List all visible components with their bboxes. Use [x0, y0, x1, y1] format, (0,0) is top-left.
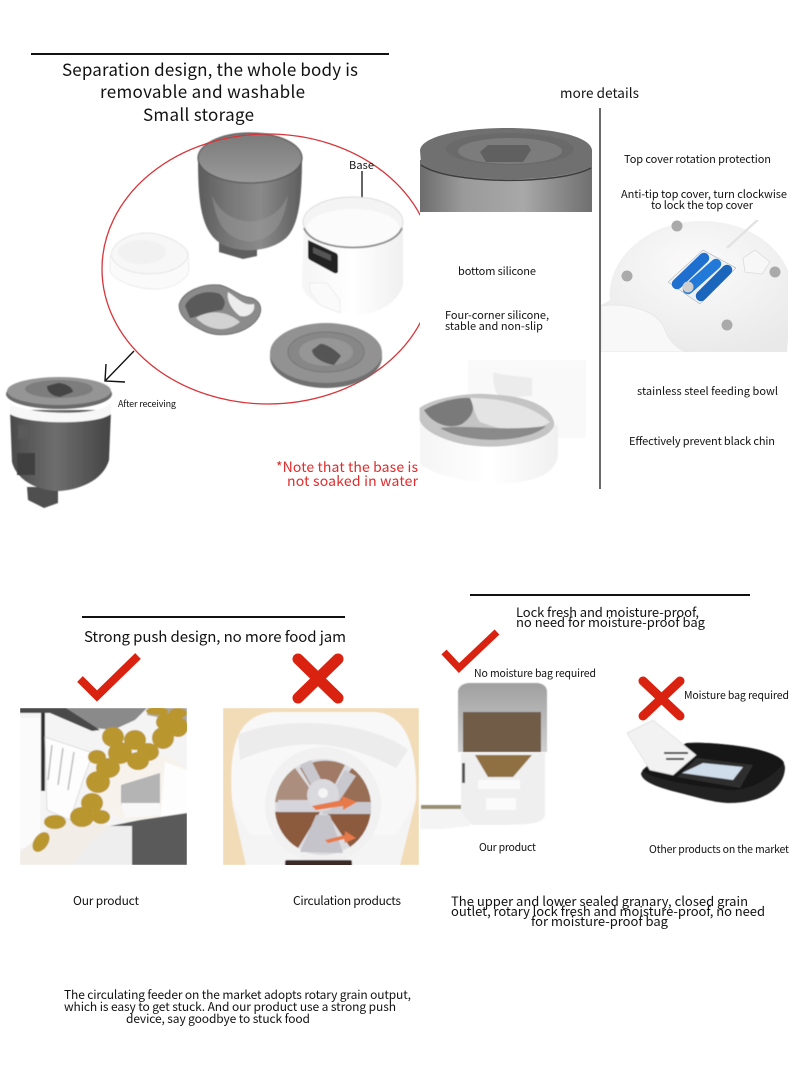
- text: sealed granary explanation: for moisture-proof bag: [531, 911, 669, 930]
- caption: four-corner silicone: stable and non-slip: [445, 318, 543, 334]
- panel: separation design heading: [31, 54, 389, 126]
- caption: anti-tip top cover: to lock the top cover: [651, 197, 754, 213]
- text: sealed granary explanation: The upper and lower sealed granary, closed grain: [451, 891, 748, 910]
- icon: red check small: [444, 632, 497, 668]
- product: assembled feeder: [6, 377, 112, 508]
- panel: separation design heading: Separation design, the whole body is: [62, 56, 358, 81]
- caption: four-corner silicone: Four-corner silicone,: [445, 307, 549, 323]
- caption: four-corner silicone: [445, 307, 549, 334]
- product: stainless steel bowl: [179, 285, 261, 335]
- caption: circulation products: Circulation products: [293, 892, 401, 909]
- text: sealed granary explanation: [451, 891, 765, 930]
- label: base: Base: [349, 157, 374, 173]
- divider: [599, 108, 601, 489]
- text: circulating feeder explanation: device, say goodbye to stuck food: [126, 1010, 310, 1027]
- caption: top cover rotation protection: Top cover rotation protection: [624, 151, 771, 167]
- red note: [276, 457, 419, 491]
- product: other tray with moisture bag: [627, 720, 785, 803]
- image: feeding bowl: [420, 360, 586, 483]
- caption: after receiving: After receiving: [118, 397, 176, 410]
- heading: lock fresh: no need for moisture-proof bag: [516, 612, 706, 631]
- label: base: [349, 157, 374, 200]
- caption: anti-tip top cover: [621, 186, 787, 213]
- caption: other products on the market: Other products on the market: [649, 842, 789, 857]
- red note: *Note that the base is: [276, 457, 418, 477]
- red note: not soaked in water: [287, 471, 419, 491]
- panel: separation design heading: removable and washable: [100, 78, 305, 103]
- product: white base unit: [302, 197, 403, 315]
- text: circulating feeder explanation: The circulating feeder on the market adopts rotary grain output,: [64, 986, 411, 1003]
- heading: more details: more details: [560, 82, 639, 102]
- product: white bowl: [110, 233, 189, 289]
- image: our product push mechanism: [20, 707, 188, 865]
- image: circulation product: [223, 708, 419, 868]
- caption: our product feeder: Our product: [479, 840, 536, 855]
- heading: strong push design: Strong push design, no more food jam: [84, 626, 346, 647]
- red ellipse outline: [102, 134, 434, 404]
- text: sealed granary explanation: outlet, rotary lock fresh and moisture-proof, no need: [451, 901, 765, 920]
- icon: red cross: [298, 659, 338, 698]
- image: top cover: [420, 128, 592, 212]
- text: circulating feeder explanation: which is easy to get stuck. And our product use a strong push: [64, 998, 396, 1015]
- label: moisture bag required: Moisture bag required: [684, 688, 789, 703]
- heading: lock fresh: [470, 595, 750, 631]
- product: grey lid: [270, 323, 382, 388]
- panel: separation design heading: Small storage: [143, 101, 254, 126]
- product: our feeder: [420, 683, 547, 829]
- product: grey food tank: [198, 133, 302, 259]
- icon: red cross small: [643, 681, 680, 716]
- caption: stainless steel feeding bowl: stainless steel feeding bowl: [637, 383, 778, 399]
- caption: bottom silicone: bottom silicone: [458, 263, 536, 279]
- icon: red check: [80, 656, 138, 696]
- label: no moisture bag required: No moisture bag required: [474, 666, 596, 681]
- arrow to assembled product: [105, 351, 134, 382]
- heading: lock fresh: Lock fresh and moisture-proof,: [516, 602, 699, 621]
- caption: prevent black chin: Effectively prevent black chin: [629, 433, 775, 449]
- image: battery underside: [601, 215, 792, 352]
- caption: our product: Our product: [73, 892, 139, 909]
- text: circulating feeder explanation: [64, 986, 411, 1027]
- caption: anti-tip top cover: Anti-tip top cover, turn clockwise: [621, 186, 787, 202]
